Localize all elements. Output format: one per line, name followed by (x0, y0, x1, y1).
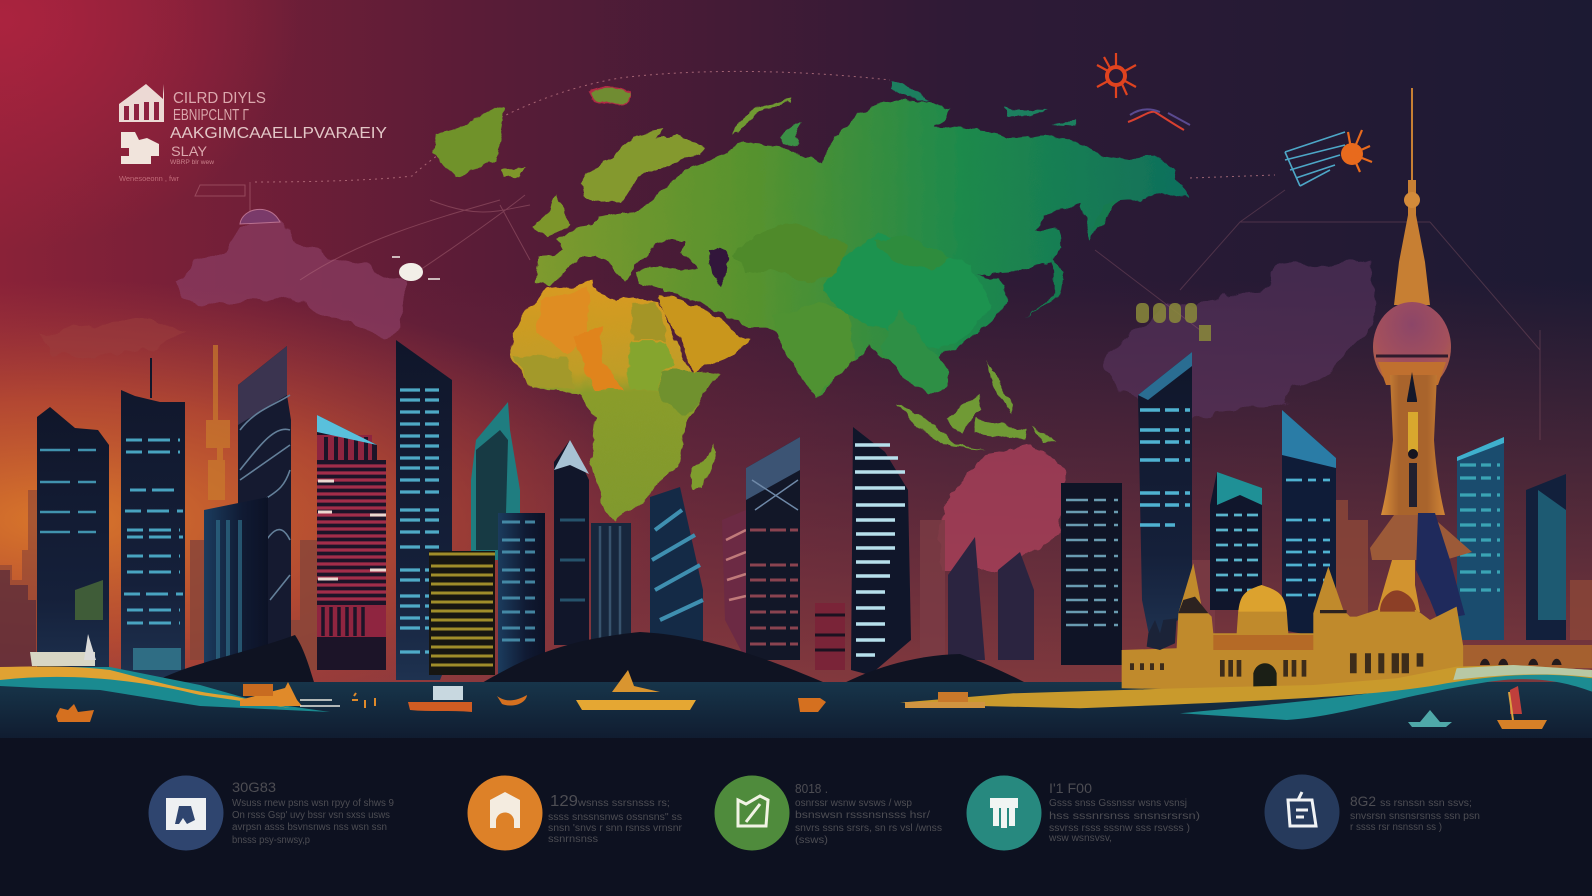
dotted route lines (195, 71, 1540, 440)
bright striped tower (851, 427, 911, 675)
stat 4 text: hss sssnrsnss snsnsrsrsn) (1049, 811, 1200, 822)
dark glass tower (1526, 474, 1566, 640)
left shore sand and teal wave (0, 666, 330, 712)
stat 5 text: 8G2 (1350, 793, 1376, 809)
caspian sea (708, 247, 729, 287)
sudan green (630, 342, 675, 390)
stat 1 (148, 776, 394, 850)
arabian peninsula (660, 297, 749, 372)
faint landmass: right purple region (1104, 258, 1379, 421)
boat: left small (56, 704, 94, 722)
distant orange pagoda (206, 345, 230, 500)
stat 4 text: I'1 F00 (1049, 780, 1092, 796)
eurasia (535, 100, 1190, 398)
northern islands (892, 80, 1076, 127)
stat 5 text: snvsrsn snsnsrsnss ssn psn (1350, 811, 1480, 822)
teal right tower (1457, 437, 1504, 640)
blue curtain (1416, 513, 1465, 620)
boat: long ferry (905, 692, 985, 708)
boat: red orange barge (408, 686, 472, 712)
stat 1 text: Wsuss rnew psns wsn rpyy of shws 9 (232, 798, 394, 809)
arctic arc (732, 98, 791, 133)
faint landmass: americas (left) (170, 219, 412, 337)
stat 3 (714, 776, 942, 850)
indonesia (897, 360, 1058, 450)
icon: fan burst (1285, 130, 1372, 186)
building 4 red striped (317, 415, 386, 670)
mongolia (874, 235, 951, 270)
icon: navy circle (1264, 774, 1340, 850)
icon: white moon (392, 257, 440, 281)
building 6 (498, 513, 545, 680)
bridge arches (1480, 659, 1562, 665)
stat 2 text: wsnss ssrsnsss rs; (577, 798, 670, 809)
skyline: centre buildings (554, 427, 1122, 675)
stat 2 text: ssss snssnsnws ossnsns" ss (548, 812, 682, 823)
india (772, 303, 854, 398)
stat 4 (966, 776, 1200, 850)
swirl building (650, 487, 703, 645)
building 5 (396, 340, 452, 680)
stat 1 text: 30G83 (232, 779, 276, 795)
distant skyline silhouettes (0, 490, 1592, 670)
spire building (554, 440, 589, 645)
stat 5 text (1350, 793, 1480, 833)
boat: yellow cargo ship (576, 670, 696, 710)
stat 5 text: ss rsnssn ssn ssvs; (1380, 798, 1472, 809)
lower tower with arch (1377, 560, 1420, 612)
stat 2 text: snsn 'snvs r snn rsnss vrnsnr (548, 823, 683, 834)
muted dark towers (948, 537, 1034, 660)
red curved building (722, 510, 746, 660)
stat 2 text: 129 (550, 793, 578, 810)
stripe block (591, 523, 631, 643)
boat: sail (1497, 686, 1547, 729)
dark trees (1147, 618, 1177, 650)
stat 1 text (232, 779, 394, 846)
building 2 (121, 358, 185, 680)
stat 1 text: bnsss psy-snwsy,p (232, 835, 310, 846)
title block: Wenesoeonn , fwr (119, 176, 180, 183)
stat 3 text: 8018 . (795, 781, 828, 796)
left pier ship (30, 634, 96, 666)
oriental pearl tower (1370, 88, 1472, 620)
australia (938, 445, 1065, 570)
iceland greenland landmass (433, 105, 504, 177)
palace band (1213, 635, 1313, 650)
icon: blue circle (148, 776, 224, 850)
antenna and spire (1394, 88, 1430, 305)
icon: squiggle motif (1128, 109, 1190, 130)
palace (1122, 563, 1592, 690)
stat 2 text: ssnrnsnss (548, 834, 598, 845)
palace mass (1122, 563, 1463, 690)
sakhalin and japan (1025, 200, 1116, 318)
right shore sand and teal (900, 665, 1592, 720)
china highlight (823, 233, 991, 350)
palace windows (1130, 653, 1423, 677)
stat 3 text: bsnswsn rsssnsnsss hsr/ (795, 810, 930, 821)
boat: ferry (240, 682, 340, 706)
icon: red sun (1097, 53, 1136, 98)
stat 4 text: Gsss snss Gssnssr wsns vsnsj (1049, 798, 1187, 809)
teal crown tower (1210, 472, 1262, 610)
scandinavia (581, 130, 706, 203)
southeast asia (879, 310, 948, 395)
icon: teal circle (966, 776, 1042, 850)
blue wedge tower (1282, 410, 1336, 640)
skyline: left buildings (37, 340, 545, 680)
right bridge (1463, 645, 1592, 668)
central arch (1253, 663, 1277, 687)
stat 4 text: ssvrss rsss sssnw sss rsvsss ) (1049, 823, 1190, 834)
stat 1 text: avrpsn asss bsvnsnws nss wsn ssn (232, 822, 387, 833)
stat 5 text: r ssss rsr nsnssn ss ) (1350, 822, 1442, 833)
icon: chart house (119, 84, 164, 122)
hills (150, 632, 1030, 690)
madagascar (690, 444, 715, 490)
stat 3 text: snvrs ssns srsrs, sn rs vsl /wnss (795, 823, 942, 834)
building gold striped (429, 551, 495, 675)
boat: teal small (1408, 710, 1452, 727)
small red block (815, 603, 845, 670)
title block (119, 84, 387, 183)
sahara orange patch (537, 287, 588, 353)
boat: small markers (352, 693, 375, 708)
title block: WBRP blr wew (170, 160, 215, 166)
stat 3 text: osnrssr wsnw svsws / wsp (795, 798, 912, 809)
building 3 front block (204, 497, 268, 670)
dome icon over americas (240, 209, 280, 224)
icon: green circle (714, 776, 790, 850)
britain (532, 193, 571, 237)
boats (56, 670, 1547, 729)
icon: orange circle (468, 776, 542, 850)
stat 4 text: wsw wsnsvsv, (1048, 833, 1112, 844)
central orange patch (573, 327, 624, 390)
stat 2 (468, 776, 683, 850)
water (0, 682, 1592, 739)
faint landmass: lower left haze (45, 322, 185, 357)
horn of africa (659, 370, 718, 417)
tall blue tower (1138, 352, 1192, 640)
title block: EBNIPCLNT Γ (173, 107, 249, 124)
building teal spire (471, 402, 520, 560)
building dark crown (746, 437, 800, 660)
skyline: right buildings (1138, 352, 1566, 640)
west africa green (514, 355, 573, 390)
stat 5 (1264, 774, 1480, 850)
boat: curved canoe (497, 695, 527, 706)
building 3 lattice tower (238, 346, 291, 680)
base skirt (1370, 515, 1472, 560)
building striped right (1061, 483, 1122, 665)
world map (433, 80, 1190, 520)
stat 2 text (548, 793, 683, 845)
egypt patch (632, 303, 667, 340)
small island (502, 166, 527, 177)
pearl sphere (1373, 302, 1451, 392)
bottom panel (0, 738, 1592, 896)
tower arch top (1380, 590, 1415, 612)
stat 3 text (795, 781, 942, 846)
gold dome (1238, 585, 1287, 612)
boat: small orange block (798, 698, 826, 712)
shaft (1381, 375, 1445, 515)
stat 1 text: On rsss Gsp' uvy bssr vsn sxss usws (232, 810, 390, 821)
title block: SLAY (171, 143, 208, 159)
building 1 (37, 407, 109, 680)
olive label blocks (1136, 303, 1211, 341)
novaya zemlya (780, 120, 803, 147)
title text: CILRD DIYLS (173, 90, 266, 107)
africa (512, 282, 718, 520)
central asia shade (731, 223, 849, 283)
icon: small block glyph (121, 132, 159, 164)
title block: AAKGIMCAAELLPVARAEIY (170, 125, 387, 142)
stat 3 text: (ssws) (795, 835, 828, 846)
tower caps (1178, 597, 1347, 613)
icon: small red green blob (590, 87, 629, 105)
stat 4 text (1048, 780, 1200, 844)
